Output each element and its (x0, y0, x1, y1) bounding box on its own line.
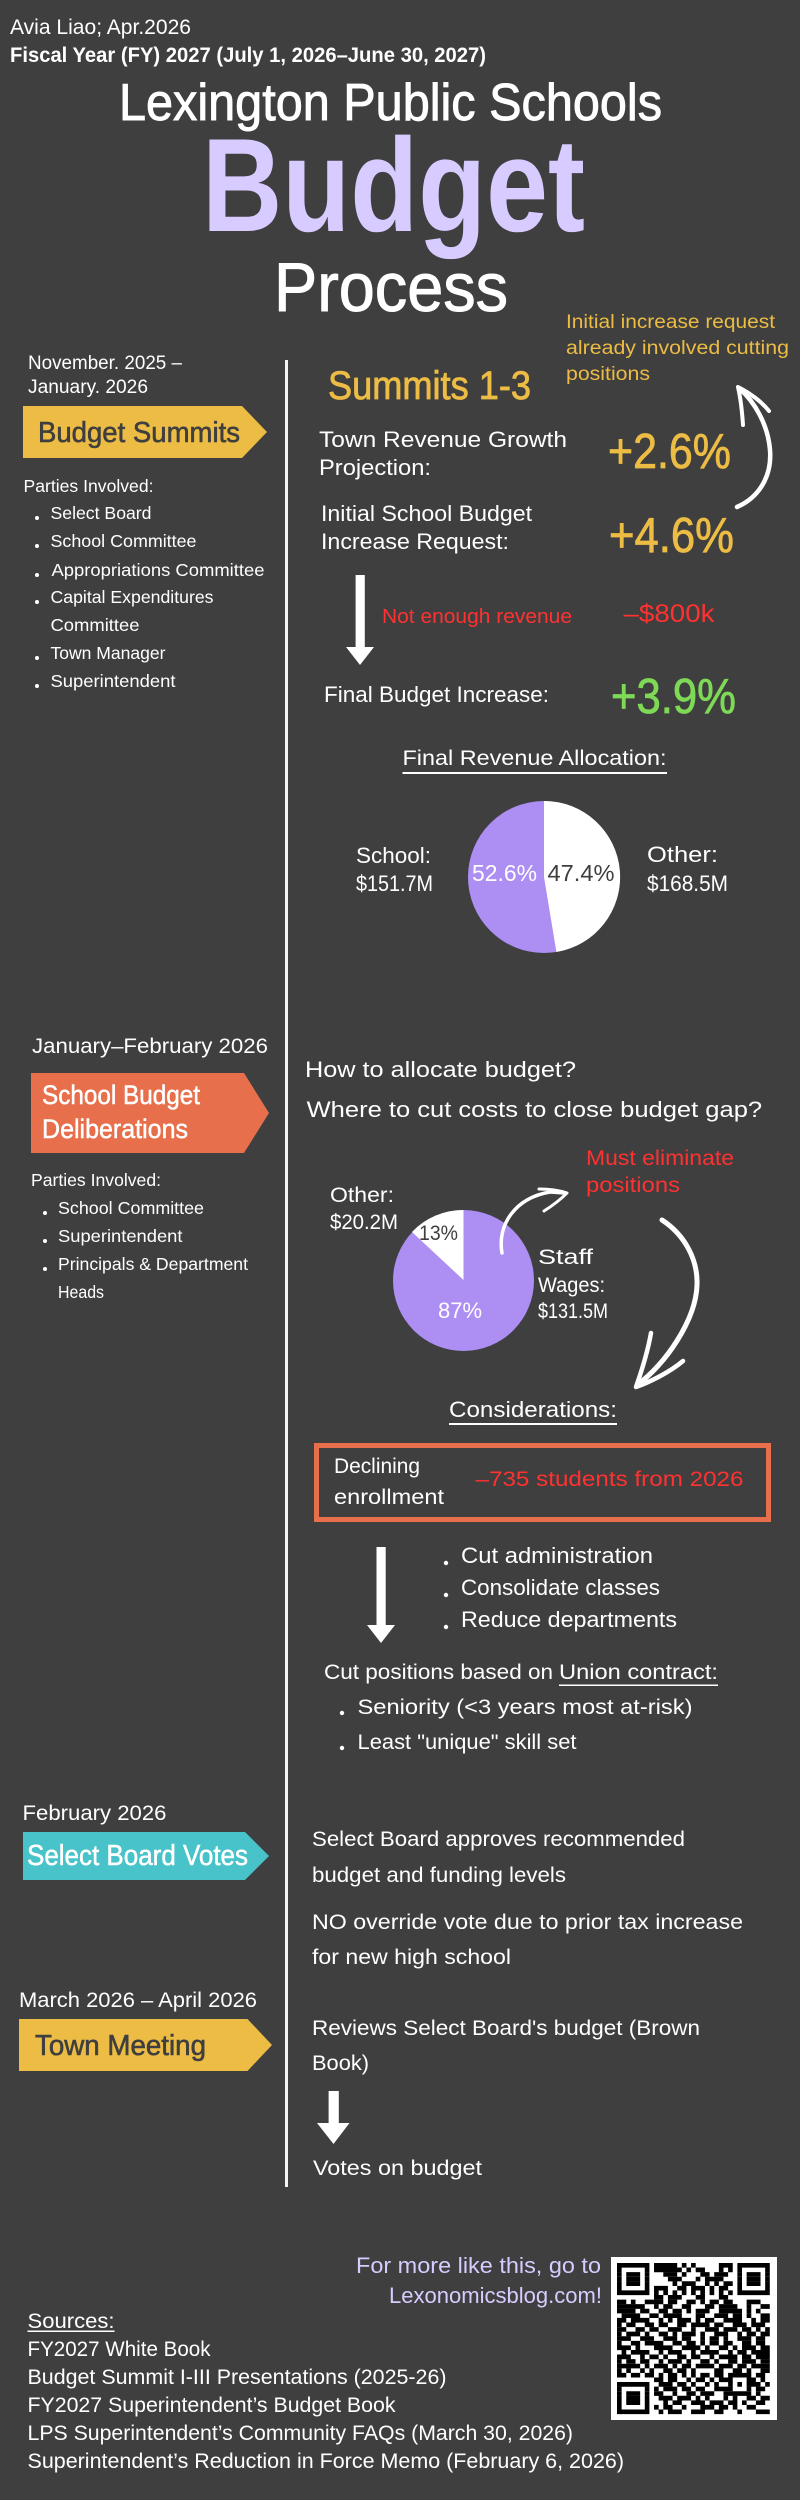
title: Lexington Public Schools (119, 74, 662, 132)
heading: considerations: Considerations: (449, 1397, 617, 1422)
callout: initial increase request: Initial increase request (566, 312, 776, 333)
override text: for new high school (312, 1946, 511, 1969)
sources: FY2027 Superintendent’s Budget Book (28, 2394, 396, 2417)
stat: -$800k: –$800k (624, 600, 715, 628)
review text: Book) (312, 2052, 369, 2075)
panel: deliberations content (305, 1057, 768, 1754)
parties involved list: School Committee (50, 531, 196, 551)
timeline vertical line (285, 360, 288, 2187)
parties involved list: Select Board (50, 503, 152, 523)
panel: town meeting (19, 1989, 700, 2180)
parties involved list: Committee (50, 615, 140, 635)
staff wages label: Staff (538, 1246, 593, 1269)
school label (356, 843, 433, 896)
banner: budget summits (23, 406, 267, 458)
parties involved list: Appropriations Committee (52, 560, 264, 580)
initial school budget label: Increase Request: (321, 529, 509, 554)
initial school budget label: Initial School Budget (321, 501, 533, 526)
stat: +2.6%: +2.6% (608, 425, 731, 479)
fiscal year note: Fiscal Year (FY) 2027 (July 1, 2026–June 30, 2027) (10, 44, 486, 67)
callout: must eliminate positions: Must eliminate (586, 1147, 734, 1170)
banner: school budget deliberations: Deliberations (42, 1114, 188, 1144)
approval text (312, 1828, 685, 1887)
other label: $20.2M (330, 1211, 398, 1234)
callout box: declining enrollment: Declining (334, 1455, 420, 1478)
question: cut costs: Where to cut costs to close budget gap? (307, 1097, 762, 1122)
icon: down arrow (367, 1547, 395, 1643)
icon: down arrow (346, 575, 374, 665)
question: allocate: How to allocate budget? (305, 1057, 576, 1082)
not enough revenue note: Not enough revenue (382, 606, 572, 628)
school label: School: (356, 843, 431, 868)
call to action: For more like this, go to (356, 2253, 601, 2278)
icon: curved arrow to positions (501, 1189, 567, 1253)
final budget increase label: Final Budget Increase: (324, 682, 549, 707)
sources: Budget Summit I-III Presentations (2025-26) (28, 2366, 447, 2389)
banner: town meeting (19, 2019, 272, 2071)
other label: Other: (647, 842, 718, 867)
other label (647, 842, 728, 896)
town revenue growth label: Projection: (319, 455, 431, 480)
cost cutting list (444, 1543, 677, 1632)
banner: select board votes: Select Board Votes (27, 1840, 248, 1872)
review text: Reviews Select Board's budget (Brown (312, 2017, 700, 2040)
union contract line: Union contract: (559, 1661, 718, 1684)
town revenue growth label (319, 427, 567, 480)
panel: summits content (319, 312, 789, 953)
parties involved list: Parties Involved: (24, 476, 154, 496)
union contract criteria list (340, 1696, 692, 1754)
pie chart: revenue allocation: 52.6% (472, 860, 537, 886)
parties involved list: Town Manager (50, 643, 166, 663)
union contract criteria list: Seniority (<3 years most at-risk) (358, 1696, 692, 1719)
stat: +4.6%: +4.6% (609, 509, 734, 563)
banner: school budget deliberations (31, 1073, 269, 1153)
review text (312, 2017, 700, 2075)
sources: FY2027 White Book (28, 2338, 211, 2361)
union contract line (324, 1661, 718, 1686)
cost cutting list: Reduce departments (461, 1607, 677, 1632)
callout: initial increase request (566, 312, 789, 385)
votes text: Votes on budget (313, 2157, 482, 2180)
staff wages label: Wages: (538, 1274, 605, 1297)
override text (312, 1911, 743, 1969)
icon: curved arrow to considerations (636, 1220, 697, 1387)
heading: final revenue allocation: Final Revenue Allocation: (402, 747, 666, 770)
callout: must eliminate positions (586, 1147, 734, 1197)
parties involved list: Capital Expenditures (50, 587, 214, 607)
date: January–February 2026 (32, 1035, 268, 1058)
approval text: Select Board approves recommended (312, 1828, 685, 1851)
parties involved list: Principals & Department (58, 1254, 248, 1274)
date: February 2026 (22, 1802, 166, 1825)
sources: Superintendent’s Reduction in Force Memo (February 6, 2026) (28, 2450, 624, 2473)
date: March 2026 – April 2026 (19, 1989, 257, 2012)
title (119, 74, 662, 326)
override text: NO override vote due to prior tax increase (312, 1911, 743, 1934)
sources (28, 2310, 624, 2473)
school label: $151.7M (356, 871, 433, 896)
callout: initial increase request: positions (566, 364, 650, 385)
parties involved list: Superintendent (58, 1226, 183, 1246)
panel: select board votes (22, 1802, 743, 1969)
approval text: budget and funding levels (312, 1864, 566, 1887)
banner: town meeting: Town Meeting (35, 2030, 206, 2062)
panel: school budget deliberations timeline (31, 1035, 269, 1302)
union contract criteria list: Least "unique" skill set (358, 1731, 577, 1754)
initial school budget label (321, 501, 533, 554)
callout box: declining enrollment: –735 students from 2026 (476, 1468, 744, 1491)
call to action (356, 2253, 602, 2308)
parties involved list: Heads (58, 1282, 104, 1302)
date range: November. 2025 – (28, 353, 182, 374)
cost cutting list: Consolidate classes (461, 1575, 660, 1600)
banner: budget summits: Budget Summits (38, 417, 240, 449)
QR code (611, 2257, 777, 2420)
pie chart: revenue allocation (468, 801, 620, 953)
pie chart: revenue allocation: 47.4% (548, 860, 614, 886)
icon: down arrow (317, 2091, 350, 2144)
title: Budget (202, 112, 585, 260)
date range: January. 2026 (28, 377, 148, 398)
title: Process (274, 249, 508, 326)
other label (330, 1184, 398, 1234)
sources: LPS Superintendent’s Community FAQs (March 30, 2026) (28, 2422, 573, 2445)
union contract line: Cut positions based on (324, 1661, 553, 1684)
icon: curved arrow up (737, 387, 770, 507)
sources: Sources: (28, 2310, 115, 2333)
banner: select board votes (23, 1832, 269, 1880)
parties involved list: Superintendent (50, 671, 176, 691)
parties involved list (31, 1170, 248, 1302)
byline: Avia Liao; Apr.2026 (10, 16, 191, 39)
callout box: declining enrollment (316, 1446, 768, 1520)
cost cutting list: Cut administration (461, 1543, 653, 1568)
callout: must eliminate positions: positions (586, 1174, 680, 1197)
banner: school budget deliberations: School Budget (42, 1080, 200, 1110)
pie chart: staff wages (393, 1210, 534, 1351)
stat: +3.9%: +3.9% (611, 670, 736, 724)
callout box: declining enrollment: enrollment (334, 1486, 444, 1509)
date range (28, 353, 182, 398)
parties involved list (24, 476, 264, 691)
parties involved list: School Committee (58, 1198, 204, 1218)
pie chart: staff wages: 13% (419, 1222, 458, 1245)
staff wages label (538, 1246, 608, 1323)
heading: summits 1-3: Summits 1-3 (328, 364, 531, 408)
panel: budget summits timeline (23, 353, 267, 691)
call to action: Lexonomicsblog.com! (389, 2283, 602, 2308)
callout: initial increase request: already involved cutting (566, 338, 789, 359)
parties involved list: Parties Involved: (31, 1170, 161, 1190)
town revenue growth label: Town Revenue Growth (319, 427, 567, 452)
other label: Other: (330, 1184, 394, 1207)
other label: $168.5M (647, 871, 728, 896)
staff wages label: $131.5M (538, 1300, 608, 1323)
pie chart: staff wages: 87% (438, 1298, 482, 1323)
